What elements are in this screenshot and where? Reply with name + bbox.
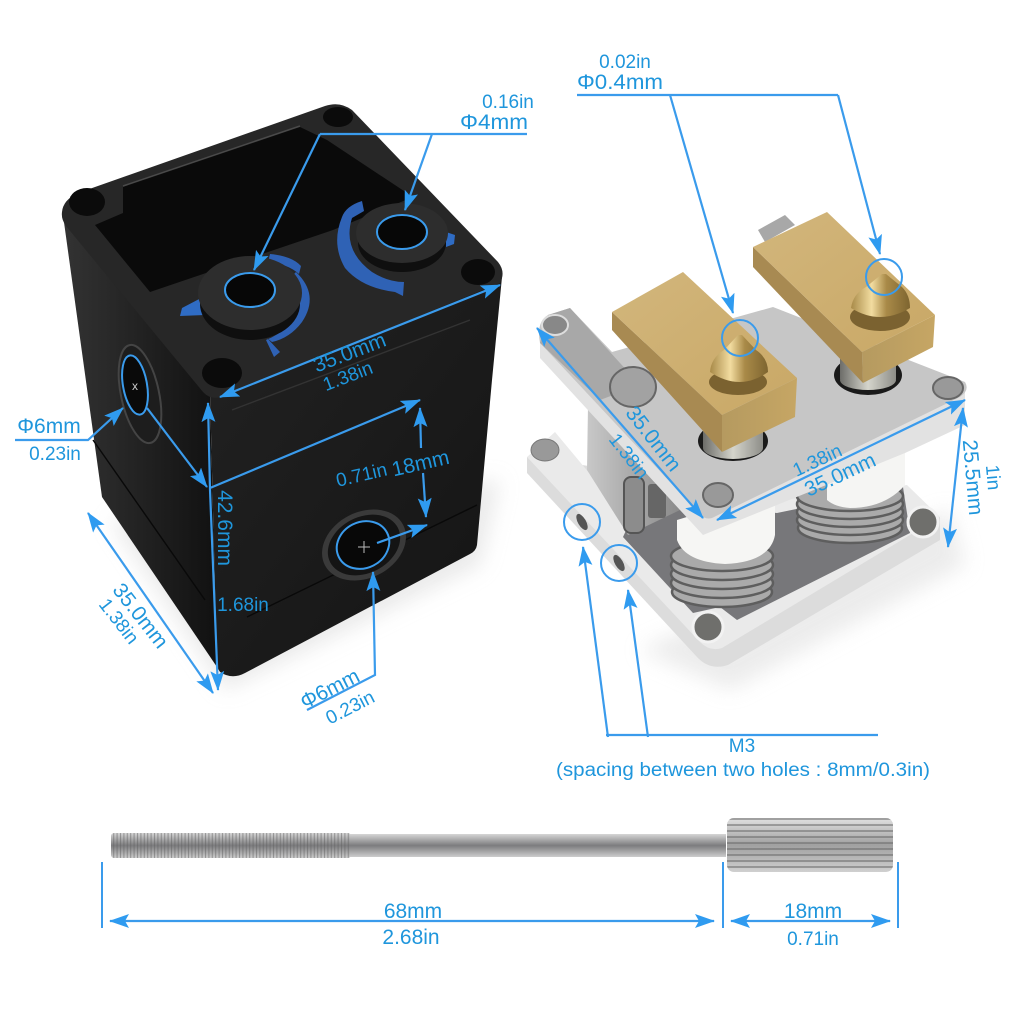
adjustment screw: [111, 818, 893, 872]
nozzle 1: [709, 335, 768, 395]
plate width dimension: 35.0mm: [801, 449, 879, 502]
housing left face: [63, 215, 217, 667]
usb port: [624, 477, 666, 533]
dual nozzle bracket assembly: [527, 212, 967, 690]
shaft length: [110, 900, 714, 949]
plate depth dimension: 35.0mm: [621, 402, 686, 476]
head length: [731, 900, 890, 950]
smooth shaft: [350, 834, 726, 857]
depth dimension: [88, 513, 213, 693]
nozzle callout: 0.02in: [599, 52, 651, 73]
hole height dimension: [210, 400, 452, 543]
housing dimensions: [15, 92, 534, 729]
front spring: [671, 490, 775, 607]
top plate: [539, 307, 967, 535]
side hole callout: [15, 408, 207, 487]
side terminal hole: x: [132, 379, 138, 393]
nozzle callout: [577, 52, 902, 356]
housing right face: [210, 277, 502, 676]
corner screw holes: [69, 107, 495, 388]
plate height dimension: [948, 408, 1004, 547]
nozzle inlet callout: [254, 92, 534, 270]
front hole callout: 0.23in: [323, 687, 378, 729]
height dimension: 42.6mm: [213, 490, 236, 566]
brass heater block 1: [612, 272, 797, 452]
front hole callout: [297, 572, 378, 729]
top width dimension: 35.0mm: [310, 329, 389, 377]
M3 callout: M3: [729, 736, 755, 757]
plate height dimension: 1in: [981, 464, 1004, 491]
threaded section: [111, 833, 351, 858]
nozzle inlet callout: 0.16in: [482, 92, 534, 113]
screw dimensions: [102, 862, 898, 950]
shaft 2: [834, 345, 902, 395]
shaft 1: [698, 410, 768, 461]
plate width dimension: 1.38in: [790, 441, 846, 481]
black extruder housing: [62, 104, 503, 690]
pneumatic coupler 1: [180, 254, 310, 357]
nozzle callout: Φ0.4mm: [577, 71, 663, 94]
top width dimension: 1.38in: [320, 358, 376, 396]
knurled head: [727, 818, 893, 872]
brass heater block 2: [753, 212, 935, 383]
plate width dimension: [717, 400, 965, 520]
front hole callout: Φ6mm: [297, 665, 364, 714]
side hole callout: 0.23in: [29, 444, 81, 465]
head length: 18mm: [784, 900, 842, 923]
head length: 0.71in: [787, 929, 839, 950]
hole height dimension: 18mm: [390, 446, 452, 481]
hole height dimension: 0.71in: [334, 460, 389, 492]
plate depth dimension: 1.38in: [604, 430, 653, 483]
nozzle inlet callout: Φ4mm: [460, 111, 528, 134]
depth dimension: 1.38in: [94, 595, 143, 648]
nozzle 2: [850, 274, 910, 331]
depth dimension: 35.0mm: [108, 579, 173, 653]
base plate: [527, 432, 940, 667]
M3 callout: (spacing between two holes : 8mm/0.3in): [556, 760, 930, 781]
side wall: [587, 405, 680, 535]
side hole callout: Φ6mm: [17, 415, 81, 438]
rear spring: [797, 440, 905, 543]
shaft length: 2.68in: [382, 926, 440, 949]
top width dimension: [220, 285, 500, 397]
height dimension: 1.68in: [217, 595, 269, 616]
top opening: [95, 127, 413, 292]
front terminal hole: [310, 496, 418, 594]
height dimension: [208, 403, 269, 690]
side terminal hole: [111, 341, 169, 447]
plate height dimension: 25.5mm: [958, 439, 987, 516]
shaft length: 68mm: [384, 900, 442, 923]
plate depth dimension: [537, 328, 703, 518]
pneumatic coupler 2: [337, 201, 455, 296]
bracket dimensions: [537, 52, 1004, 781]
M3 callout: [556, 504, 930, 781]
button screw: [610, 367, 656, 407]
housing top face: [62, 104, 503, 398]
